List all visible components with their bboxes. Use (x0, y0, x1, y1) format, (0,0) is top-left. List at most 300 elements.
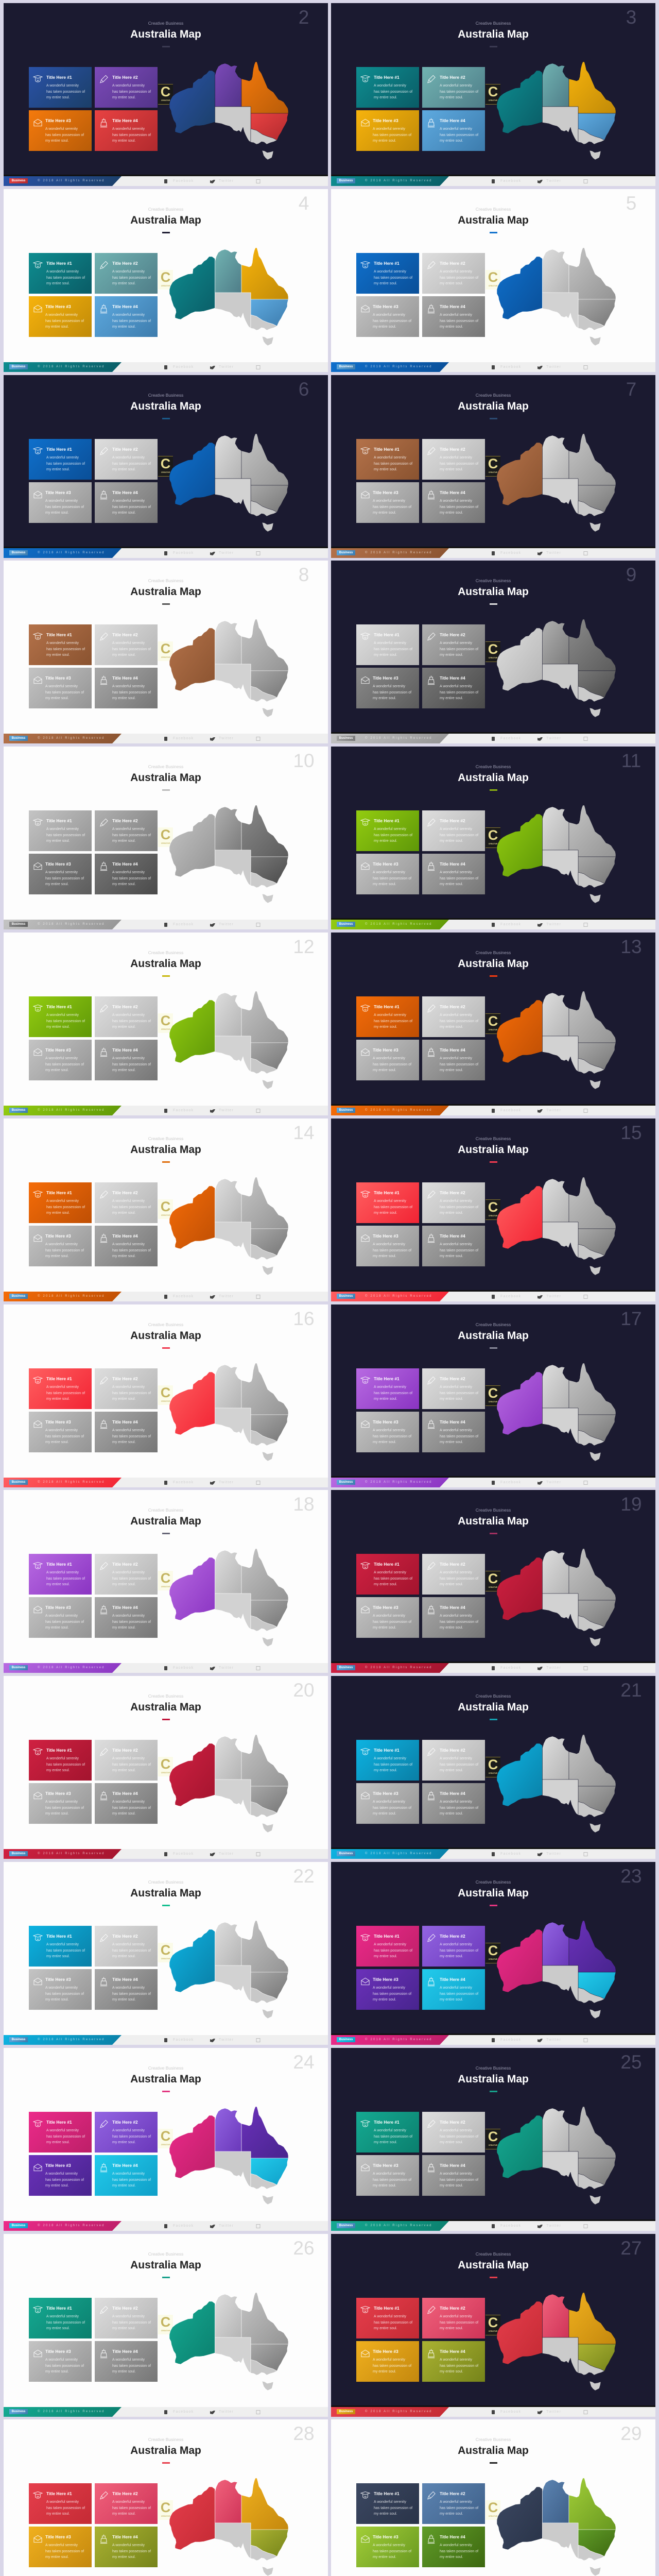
box 2: A wonderful serenity (112, 456, 145, 460)
box 3: A wonderful serenity (45, 2172, 78, 2176)
box 1: has taken possession of (46, 1206, 85, 1209)
footer: Twitter (546, 737, 561, 740)
subtitle: Creative Business (148, 2251, 183, 2257)
box 1: A wonderful serenity (374, 456, 406, 460)
map (496, 1363, 616, 1461)
box 2: my entire soul. (112, 2141, 136, 2144)
box 3: Title Here #3 (45, 675, 71, 681)
box 3: my entire soul. (45, 2370, 69, 2374)
box 2: Title Here #2 (440, 2306, 465, 2311)
box 2: A wonderful serenity (112, 1013, 145, 1017)
map (496, 1549, 616, 1647)
footer: Twitter (219, 1109, 234, 1112)
box 3: has taken possession of (373, 877, 411, 880)
subtitle: Creative Business (476, 1507, 511, 1513)
title: Australia Map (130, 1144, 201, 1156)
footer: Twitter (546, 551, 561, 555)
box 4: A wonderful serenity (112, 1614, 145, 1618)
box 4: has taken possession of (440, 133, 478, 137)
number: 6 (299, 379, 309, 400)
box 4: has taken possession of (440, 2364, 478, 2368)
number: 9 (626, 564, 636, 585)
map (496, 1735, 616, 1833)
box 1: Title Here #1 (374, 1748, 400, 1753)
footer: Facebook (173, 179, 194, 183)
footer: Business (12, 1295, 25, 1298)
box 2 (422, 2112, 485, 2153)
box 3: A wonderful serenity (45, 2544, 78, 2547)
box 3: my entire soul. (373, 1998, 396, 2002)
box 1: has taken possession of (374, 1391, 412, 1395)
box 4: has taken possession of (440, 1249, 478, 1252)
title: Australia Map (458, 28, 529, 40)
box 3 (356, 1783, 419, 1824)
box 1: A wonderful serenity (374, 641, 406, 645)
footer: Business (339, 2224, 353, 2227)
box 4: has taken possession of (112, 1249, 151, 1252)
box 1: has taken possession of (46, 2506, 85, 2510)
box 4: A wonderful serenity (440, 499, 472, 503)
subtitle: Creative Business (476, 1136, 511, 1141)
box 3: my entire soul. (373, 1255, 396, 1258)
box 4: Title Here #4 (112, 2534, 138, 2539)
box 2: Title Here #2 (112, 1562, 138, 1567)
footer: Business (12, 1109, 25, 1112)
accent (162, 975, 170, 977)
map (168, 2105, 292, 2208)
number: 17 (620, 1308, 642, 1329)
box 2 (422, 2298, 485, 2338)
box 3: A wonderful serenity (45, 1614, 78, 1618)
footer: © 2018 All Rights Reserved (365, 1295, 432, 1298)
number: 28 (293, 2423, 315, 2444)
watermark: CREATIVE (161, 1772, 170, 1774)
watermark: CREATIVE (489, 2144, 497, 2146)
watermark (485, 1199, 500, 1220)
subtitle: Creative Business (148, 1507, 183, 1513)
watermark: C (161, 456, 170, 471)
footer: Facebook (173, 2410, 194, 2414)
box 4 (422, 1969, 485, 2010)
box 3: A wonderful serenity (373, 2544, 405, 2547)
box 4: A wonderful serenity (440, 2358, 472, 2362)
footer: Facebook (500, 365, 521, 369)
box 1: Title Here #1 (46, 75, 72, 80)
watermark (158, 2129, 173, 2148)
footer (331, 2035, 655, 2045)
subtitle: Creative Business (476, 578, 511, 583)
box 3: my entire soul. (45, 511, 69, 515)
box 1: my entire soul. (46, 653, 70, 657)
box 1: my entire soul. (374, 1769, 397, 1772)
footer: © 2018 All Rights Reserved (38, 923, 105, 926)
box 2: A wonderful serenity (440, 1757, 472, 1760)
map (496, 2291, 619, 2394)
box 4 (95, 1969, 158, 2010)
accent (162, 46, 170, 47)
watermark: CREATIVE (161, 842, 170, 844)
box 3: my entire soul. (45, 1812, 69, 1816)
box 1: Title Here #1 (374, 818, 400, 823)
title: Australia Map (130, 214, 201, 226)
watermark (485, 1571, 500, 1591)
number: 4 (299, 193, 309, 214)
box 4: has taken possession of (112, 2178, 151, 2181)
box 2: has taken possession of (440, 462, 478, 466)
box 3: Title Here #3 (45, 1233, 71, 1239)
subtitle: Creative Business (476, 1322, 511, 1327)
box 2: A wonderful serenity (440, 1385, 472, 1389)
subtitle: Creative Business (476, 1879, 511, 1885)
title: Australia Map (130, 28, 201, 40)
box 2 (95, 1740, 158, 1781)
accent (490, 1161, 497, 1162)
footer (4, 734, 328, 743)
subtitle: Creative Business (148, 2437, 183, 2442)
box 4 (95, 482, 158, 523)
box 3: A wonderful serenity (45, 1243, 78, 1246)
footer: Business (12, 1666, 25, 1669)
box 1: A wonderful serenity (46, 1757, 79, 1760)
map (169, 1549, 288, 1647)
number: 29 (620, 2423, 642, 2444)
box 1: Title Here #1 (46, 1376, 72, 1381)
box 3: my entire soul. (45, 883, 69, 886)
footer: © 2018 All Rights Reserved (365, 2410, 432, 2413)
box 1: Title Here #1 (46, 632, 72, 637)
box 1: has taken possession of (46, 1763, 85, 1766)
box 3: has taken possession of (45, 877, 84, 880)
subtitle: Creative Business (148, 1136, 183, 1141)
box 1: A wonderful serenity (46, 270, 79, 274)
slide 13 (331, 933, 655, 1115)
box 2: Title Here #2 (112, 1748, 138, 1753)
box 3: has taken possession of (373, 319, 411, 323)
box 3: A wonderful serenity (373, 499, 405, 503)
box 1: Title Here #1 (46, 447, 72, 452)
box 4: Title Here #4 (112, 490, 138, 495)
box 4: my entire soul. (440, 1626, 463, 1630)
box 4: has taken possession of (112, 1062, 151, 1066)
box 2: has taken possession of (112, 647, 151, 651)
footer (331, 920, 655, 929)
box 1: my entire soul. (374, 282, 397, 285)
footer (4, 1292, 328, 1301)
footer: Facebook (173, 2224, 194, 2228)
box 3: A wonderful serenity (45, 2358, 78, 2362)
footer: © 2018 All Rights Reserved (365, 2038, 432, 2041)
box 4: has taken possession of (440, 319, 478, 323)
footer (331, 2407, 655, 2417)
title: Australia Map (458, 400, 529, 412)
title: Australia Map (130, 958, 201, 970)
box 4: Title Here #4 (440, 118, 465, 123)
box 1: A wonderful serenity (46, 1571, 79, 1574)
box 3 (29, 1969, 92, 2010)
box 1 (29, 810, 92, 851)
box 2 (422, 996, 485, 1037)
title: Australia Map (458, 214, 529, 226)
box 4: my entire soul. (440, 1440, 463, 1444)
box 3: my entire soul. (373, 883, 396, 886)
watermark: CREATIVE (161, 471, 170, 473)
box 1: Title Here #1 (46, 1934, 72, 1939)
box 2: my entire soul. (112, 1025, 136, 1029)
slide 11 (331, 747, 655, 929)
subtitle: Creative Business (476, 2065, 511, 2071)
footer: Twitter (219, 365, 234, 369)
box 2: Title Here #2 (112, 818, 138, 823)
box 4: Title Here #4 (112, 675, 138, 681)
box 2: my entire soul. (112, 1397, 136, 1401)
watermark: C (488, 2315, 498, 2330)
box 2 (95, 2298, 158, 2338)
box 1: Title Here #1 (46, 1748, 72, 1753)
subtitle: Creative Business (476, 393, 511, 398)
slide 20 (4, 1676, 328, 1859)
box 3: my entire soul. (373, 2184, 396, 2188)
map (496, 62, 616, 160)
box 1: Title Here #1 (374, 1004, 400, 1009)
box 2: A wonderful serenity (112, 270, 145, 274)
box 3: my entire soul. (373, 1069, 396, 1072)
box 2: A wonderful serenity (112, 827, 145, 831)
box 3: my entire soul. (373, 511, 396, 515)
box 4: has taken possession of (440, 2178, 478, 2181)
box 2: Title Here #2 (112, 632, 138, 637)
box 1 (356, 1182, 419, 1223)
footer (331, 1478, 655, 1487)
box 4: my entire soul. (440, 1998, 463, 2002)
box 2: my entire soul. (440, 1397, 463, 1401)
box 2: has taken possession of (440, 2506, 478, 2510)
box 2: has taken possession of (112, 1391, 151, 1395)
box 1: has taken possession of (46, 2320, 85, 2325)
box 1: my entire soul. (374, 1397, 397, 1401)
box 4: A wonderful serenity (112, 1429, 145, 1432)
watermark: CREATIVE (489, 657, 497, 659)
map (169, 62, 288, 160)
box 2: Title Here #2 (440, 1748, 465, 1753)
box 4: has taken possession of (440, 1062, 478, 1066)
box 1 (356, 996, 419, 1037)
watermark (158, 1199, 173, 1219)
box 2: my entire soul. (440, 468, 463, 471)
box 3: Title Here #3 (373, 1977, 398, 1982)
box 4: my entire soul. (112, 1626, 136, 1630)
number: 14 (293, 1122, 315, 1143)
box 3: has taken possession of (45, 1806, 84, 1809)
box 2: my entire soul. (112, 1955, 136, 1958)
title: Australia Map (458, 958, 529, 970)
box 3: Title Here #3 (45, 1791, 71, 1796)
box 2: Title Here #2 (112, 1934, 138, 1939)
box 4: Title Here #4 (440, 1605, 465, 1610)
box 1: my entire soul. (374, 96, 397, 99)
footer: © 2018 All Rights Reserved (38, 2224, 105, 2227)
watermark: C (488, 84, 498, 99)
box 2: A wonderful serenity (112, 1199, 145, 1203)
footer: Twitter (546, 1481, 561, 1484)
watermark (158, 2315, 173, 2334)
box 4: has taken possession of (112, 1434, 151, 1438)
footer (331, 1849, 655, 1859)
box 1: my entire soul. (46, 2141, 70, 2144)
accent (162, 1347, 170, 1349)
box 3: my entire soul. (373, 1626, 396, 1630)
watermark (158, 456, 173, 477)
box 2: my entire soul. (440, 1211, 463, 1215)
box 4: has taken possession of (440, 877, 478, 880)
box 4 (95, 2341, 158, 2382)
watermark: CREATIVE (161, 1586, 170, 1588)
box 1: has taken possession of (46, 1391, 85, 1395)
slide 6 (4, 375, 328, 558)
footer: Business (12, 923, 25, 926)
box 1 (29, 2112, 92, 2153)
slide 10 (4, 747, 328, 929)
box 1: my entire soul. (46, 1769, 70, 1772)
accent (490, 232, 497, 233)
watermark: CREATIVE (489, 2515, 497, 2517)
box 1: has taken possession of (46, 647, 85, 651)
footer: Facebook (500, 1666, 521, 1670)
box 3: Title Here #3 (45, 861, 71, 867)
subtitle: Creative Business (148, 393, 183, 398)
box 3: has taken possession of (45, 505, 84, 509)
box 2: has taken possession of (112, 2135, 151, 2138)
box 2: A wonderful serenity (440, 1199, 472, 1203)
box 2: Title Here #2 (112, 2306, 138, 2311)
footer: Twitter (219, 551, 234, 555)
subtitle: Creative Business (476, 21, 511, 26)
box 1 (356, 810, 419, 851)
box 1: my entire soul. (374, 2327, 397, 2330)
accent (162, 1719, 170, 1720)
footer: © 2018 All Rights Reserved (365, 923, 432, 926)
map (169, 1735, 288, 1832)
box 4: Title Here #4 (440, 2163, 465, 2168)
box 1: has taken possession of (374, 276, 412, 279)
box 3 (356, 1226, 419, 1266)
box 1: Title Here #1 (374, 2120, 400, 2125)
slide 14 (4, 1118, 328, 1301)
box 4: A wonderful serenity (112, 499, 145, 503)
box 3: has taken possession of (45, 690, 84, 694)
slide 22 (4, 1862, 328, 2045)
box 4: has taken possession of (440, 1620, 478, 1624)
box 4: my entire soul. (440, 1255, 463, 1258)
title: Australia Map (458, 2259, 529, 2271)
slide 8 (4, 561, 328, 743)
map (169, 991, 288, 1089)
box 3: Title Here #3 (373, 1791, 398, 1796)
box 3: A wonderful serenity (373, 313, 405, 317)
box 3: A wonderful serenity (45, 1057, 78, 1060)
box 3: has taken possession of (373, 2549, 411, 2553)
box 4: A wonderful serenity (112, 313, 145, 317)
box 3: A wonderful serenity (45, 871, 78, 874)
box 4: A wonderful serenity (440, 313, 472, 317)
accent (490, 1347, 497, 1349)
box 3: A wonderful serenity (373, 1800, 405, 1804)
subtitle: Creative Business (148, 1322, 183, 1327)
watermark: C (488, 827, 498, 843)
footer: Facebook (173, 1295, 194, 1298)
number: 7 (626, 379, 636, 400)
box 1 (356, 1740, 419, 1781)
box 4: my entire soul. (440, 2184, 463, 2188)
box 3: my entire soul. (45, 1626, 69, 1630)
slide 12 (4, 933, 328, 1115)
box 4 (95, 1226, 158, 1266)
box 4 (422, 668, 485, 708)
box 3: A wonderful serenity (45, 1800, 78, 1804)
watermark: CREATIVE (161, 285, 170, 287)
box 1: my entire soul. (374, 2141, 397, 2144)
box 3: Title Here #3 (45, 304, 71, 309)
box 3: A wonderful serenity (373, 871, 405, 874)
box 3: Title Here #3 (373, 304, 398, 309)
footer: Business (339, 1481, 353, 1484)
footer: © 2018 All Rights Reserved (365, 2224, 432, 2227)
footer: © 2018 All Rights Reserved (365, 737, 432, 740)
footer: Facebook (500, 1295, 521, 1298)
box 2: Title Here #2 (112, 447, 138, 452)
footer (4, 2407, 328, 2417)
box 4 (95, 1412, 158, 1452)
box 4: has taken possession of (112, 2549, 151, 2553)
footer: Facebook (500, 179, 521, 183)
box 1: A wonderful serenity (46, 2129, 79, 2132)
subtitle: Creative Business (148, 950, 183, 955)
watermark: CREATIVE (161, 2330, 170, 2332)
box 4: has taken possession of (440, 1806, 478, 1809)
footer: Twitter (219, 2410, 234, 2414)
box 3: has taken possession of (373, 133, 411, 137)
box 1 (29, 2483, 92, 2524)
footer: Business (339, 1666, 353, 1669)
box 1: Title Here #1 (46, 2120, 72, 2125)
box 2: Title Here #2 (440, 632, 465, 637)
footer (4, 2035, 328, 2045)
watermark (158, 84, 173, 105)
footer: Business (12, 365, 25, 368)
slide 27 (331, 2234, 655, 2417)
footer: © 2018 All Rights Reserved (365, 179, 432, 182)
box 4 (422, 296, 485, 337)
box 4: my entire soul. (112, 1069, 136, 1072)
box 1: A wonderful serenity (374, 1943, 406, 1946)
accent (490, 1719, 497, 1720)
title: Australia Map (458, 1144, 529, 1156)
footer: Twitter (546, 2410, 561, 2414)
box 4 (422, 2155, 485, 2196)
box 2: Title Here #2 (440, 1562, 465, 1567)
box 4: A wonderful serenity (112, 1057, 145, 1060)
watermark: CREATIVE (161, 1400, 170, 1402)
title: Australia Map (458, 1515, 529, 1527)
map (496, 248, 616, 345)
number: 12 (293, 936, 315, 957)
box 1: A wonderful serenity (374, 1385, 406, 1389)
footer: Twitter (546, 1109, 561, 1112)
box 4 (95, 2527, 158, 2567)
footer: © 2018 All Rights Reserved (38, 2038, 105, 2041)
watermark: CREATIVE (161, 1958, 170, 1960)
footer: © 2018 All Rights Reserved (38, 365, 105, 368)
title: Australia Map (458, 1887, 529, 1899)
